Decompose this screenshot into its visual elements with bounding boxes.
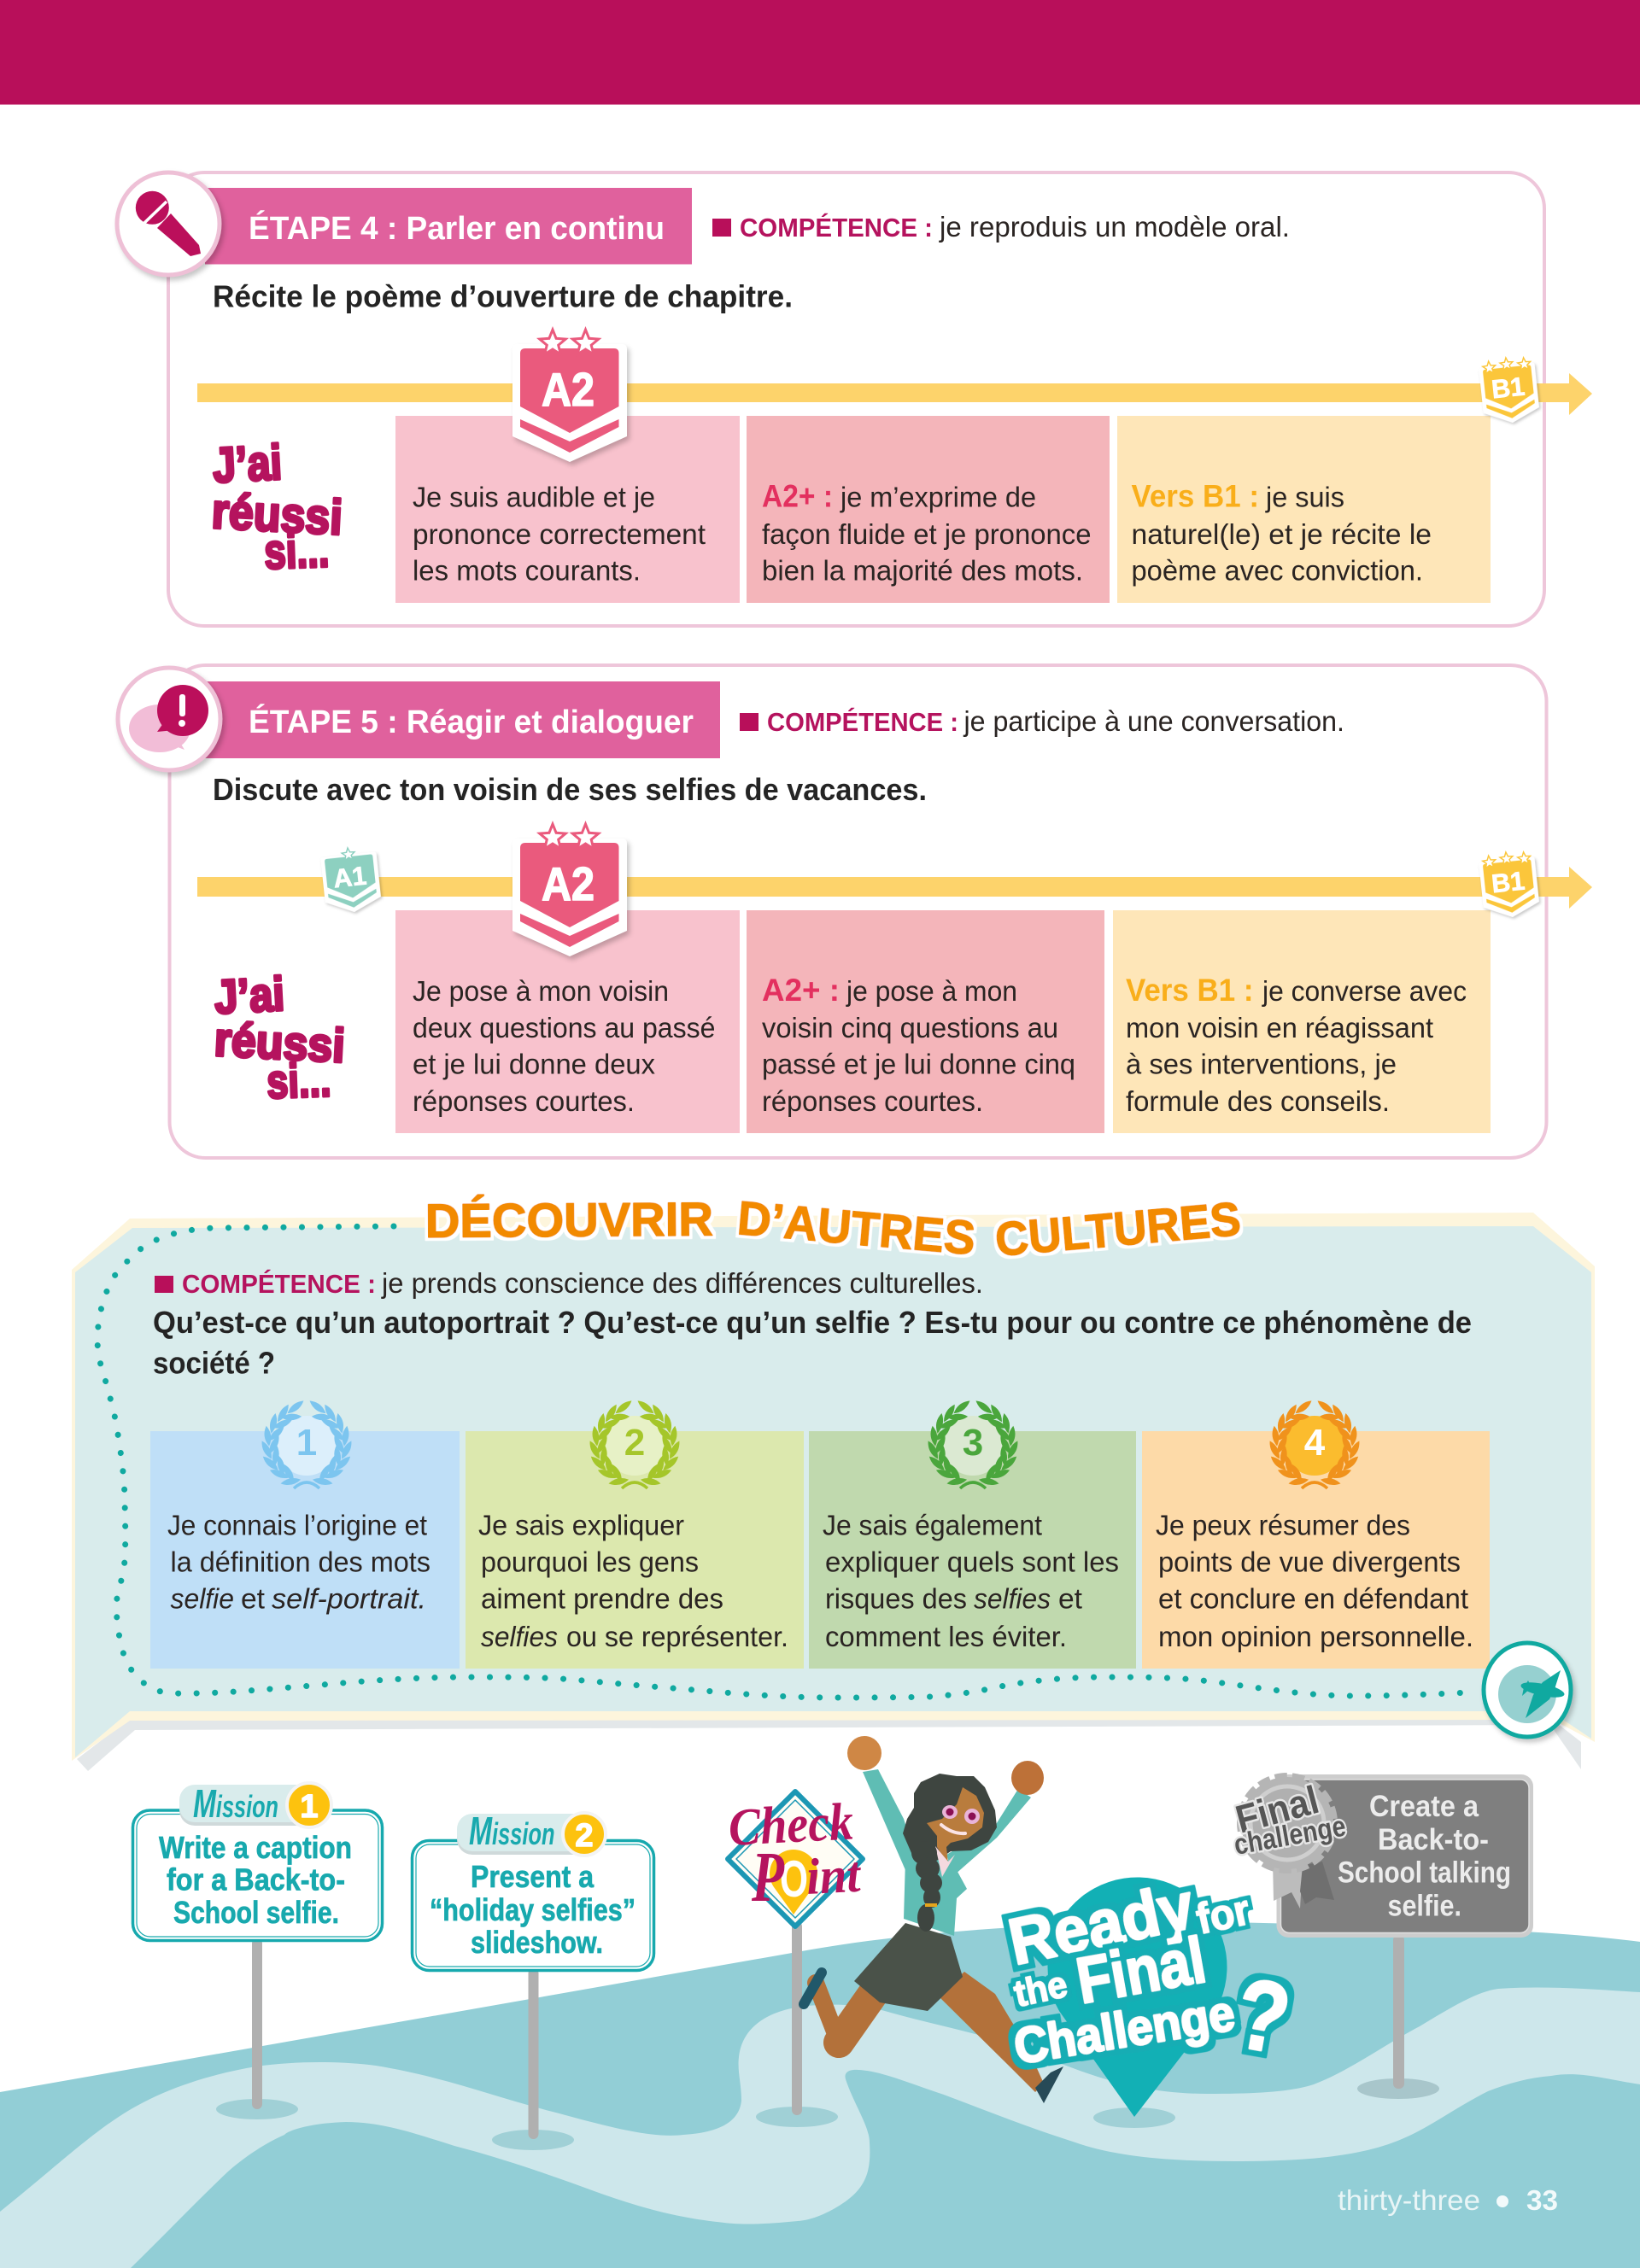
card 3: selfies — [974, 1583, 1051, 1614]
label: j'ai réussi si: si... — [266, 1052, 331, 1108]
icon: laurel 4: 4 — [1304, 1422, 1326, 1464]
callout: ready for the final challenge: Final — [1071, 1924, 1211, 2018]
sign: mission 2: “holiday selfies” — [430, 1892, 636, 1927]
arms — [863, 1769, 916, 1870]
icon: laurel 3: 3 — [963, 1422, 983, 1464]
badge: A2 — [512, 330, 627, 462]
box: vers B1 — [1117, 416, 1491, 603]
box: A2+: bien la majorité des mots. — [762, 555, 1083, 586]
icon: speech bubbles — [118, 668, 220, 770]
card 2: ou se représenter. — [566, 1621, 788, 1652]
sign: mission 1: Mission — [193, 1781, 278, 1826]
section title: CULTURES — [993, 1191, 1243, 1266]
label: j'ai réussi si: J’ai — [211, 435, 284, 494]
page number: 33 — [1526, 2184, 1558, 2216]
box: A2+: A2+ : — [762, 478, 833, 514]
heading banner: étape 5 — [205, 681, 720, 758]
rosette: Final — [1231, 1777, 1323, 1842]
character: jumping girl — [804, 1736, 1063, 2103]
competence line: je prends conscience des différences culturelles. — [381, 1267, 983, 1299]
panel: étape 4 — [117, 172, 1592, 626]
sign: mission 2: 2 — [575, 1818, 594, 1854]
sign: mission 1 — [133, 1781, 383, 2119]
hair — [903, 1774, 997, 1866]
sign: final challenge: Back-to- — [1378, 1823, 1489, 1856]
competence line: COMPÉTENCE : — [740, 213, 933, 243]
box: vers B1: je suis — [1265, 482, 1344, 512]
card 3: expliquer quels sont les — [825, 1546, 1119, 1578]
section title: DÉCOUVRIR — [425, 1192, 713, 1248]
face — [927, 1787, 984, 1864]
instruction: Récite le poème d’ouverture de chapitre. — [213, 278, 793, 314]
jacket — [904, 1847, 967, 1936]
card 3: risques des — [825, 1583, 967, 1614]
badge: A2: A2 — [542, 857, 594, 910]
callout: ready for the final challenge: the — [1010, 1963, 1071, 2015]
box: vers B1: mon voisin en réagissant — [1126, 1012, 1433, 1043]
badge: A2 — [512, 824, 627, 956]
box: vers B1: à ses interventions, je — [1126, 1049, 1397, 1079]
card 3 — [809, 1431, 1136, 1669]
braid — [911, 1841, 942, 1932]
card 1: self-portrait. — [272, 1583, 426, 1614]
fists — [847, 1736, 882, 1770]
card 4: et conclure en défendant — [1158, 1583, 1468, 1614]
sign: check point: O — [780, 1850, 808, 1908]
sign: final challenge: Create a — [1369, 1790, 1479, 1823]
card 4: mon opinion personnelle. — [1158, 1621, 1473, 1652]
box: vers B1 — [1113, 910, 1491, 1133]
callout: ready for the final challenge: Ready — [1003, 1869, 1200, 1979]
card 1: Je connais l’origine et — [167, 1510, 427, 1540]
sign: mission 1: Write a caption — [159, 1830, 352, 1865]
badge: B1 — [1478, 355, 1541, 425]
sign: mission 1: for a Back-to- — [167, 1862, 345, 1897]
box: A2 — [395, 910, 740, 1133]
box: A2+: façon fluide et je prononce — [762, 518, 1092, 550]
rosette: challenge — [1232, 1810, 1348, 1862]
card 4: points de vue divergents — [1158, 1546, 1461, 1578]
section title — [425, 1190, 1243, 1266]
label: j'ai réussi si: J’ai — [213, 967, 286, 1024]
competence line: COMPÉTENCE : — [767, 707, 958, 737]
card 2: Je sais expliquer — [478, 1510, 684, 1540]
near leg — [938, 1972, 1044, 2092]
card 2: pourquoi les gens — [481, 1546, 699, 1578]
rosette — [1231, 1777, 1348, 1909]
instruction: Discute avec ton voisin de ses selfies de vacances. — [213, 772, 927, 807]
sign: check point: P — [751, 1838, 785, 1917]
competence line: COMPÉTENCE : — [182, 1269, 376, 1299]
card 4: Je peux résumer des — [1156, 1510, 1410, 1540]
sign: check point: Check — [727, 1792, 855, 1857]
badge: B1: B1 — [1491, 867, 1526, 898]
question: Qu’est-ce qu’un autoportrait ? Qu’est-ce qu’un selfie ? Es-tu pour ou contre ce phénomène de — [153, 1305, 1472, 1340]
panel: découvrir d'autres cultures — [72, 1190, 1595, 1771]
box: A2: et je lui donne deux — [413, 1049, 655, 1079]
sign: final challenge — [1231, 1774, 1533, 2099]
card 3: et — [1058, 1583, 1082, 1614]
card 2: selfies — [481, 1621, 558, 1652]
page number: thirty-three — [1338, 2184, 1480, 2216]
level arrow — [197, 373, 1592, 415]
question — [153, 1305, 1472, 1380]
box: A2+: je m’exprime de — [840, 482, 1036, 512]
box: A2: Je suis audible et je — [413, 482, 655, 512]
card 1: la définition des mots — [171, 1546, 430, 1578]
callout: ready for the final challenge: ? — [1228, 1957, 1297, 2075]
section title: D’AUTRES — [735, 1190, 977, 1265]
sign: mission 1: 1 — [300, 1789, 319, 1825]
label: j'ai réussi si — [213, 967, 346, 1108]
landscape: road — [0, 1988, 1640, 2268]
panel: étape 5 — [118, 665, 1592, 1158]
icon: laurel 1 — [259, 1398, 354, 1488]
card 2 — [466, 1431, 804, 1669]
level arrow — [197, 867, 1592, 909]
sign: mission 2 — [412, 1809, 654, 2150]
callout: ready for the final challenge: for — [1192, 1885, 1254, 1944]
sign: mission 1: School selfie. — [173, 1895, 339, 1930]
card 3: Je sais également — [823, 1510, 1042, 1540]
question: société ? — [153, 1346, 275, 1380]
heading banner: étape 5: ÉTAPE 5 : Réagir et dialoguer — [249, 703, 694, 740]
page number — [1338, 2184, 1558, 2216]
box: vers B1: formule des conseils. — [1126, 1085, 1390, 1117]
heading banner: étape 4: ÉTAPE 4 : Parler en continu — [249, 209, 665, 247]
label: j'ai réussi si: si... — [263, 522, 330, 580]
box: A2: les mots courants. — [413, 555, 641, 586]
box: A2: deux questions au passé — [413, 1012, 716, 1043]
box: A2+: voisin cinq questions au — [762, 1012, 1058, 1043]
box: A2 — [395, 416, 740, 603]
badge: B1: B1 — [1491, 372, 1526, 404]
box: vers B1: poème avec conviction. — [1131, 555, 1423, 586]
badge: A1 — [319, 845, 383, 915]
label: j'ai réussi si: réussi — [213, 1012, 346, 1073]
sign: check point: int — [805, 1846, 864, 1905]
label: j'ai réussi si: réussi — [210, 483, 344, 546]
icon: plane — [1484, 1643, 1571, 1737]
icon: laurel 3 — [925, 1398, 1021, 1488]
badge: A1: A1 — [332, 862, 368, 893]
box: A2+ — [747, 910, 1104, 1133]
competence line: je participe à une conversation. — [964, 705, 1344, 737]
sign: mission 2: Present a — [471, 1859, 594, 1894]
box: vers B1: naturel(le) et je récite le — [1131, 518, 1432, 550]
far leg — [839, 1994, 873, 2043]
landscape: hill — [0, 1922, 1640, 2268]
callout: ready for the final challenge: Challenge — [1010, 1985, 1239, 2075]
box: A2+ — [747, 416, 1110, 603]
card 3: comment les éviter. — [825, 1621, 1067, 1652]
competence line — [712, 211, 1290, 243]
label: j'ai réussi si — [210, 435, 344, 580]
icon: microphone — [117, 172, 220, 275]
card 1 — [150, 1431, 460, 1669]
card 4 — [1142, 1431, 1490, 1669]
dotted route — [97, 1226, 1468, 1698]
icon: laurel 4 — [1267, 1398, 1362, 1488]
box: A2: prononce correctement — [413, 518, 706, 550]
icon: laurel 2 — [587, 1398, 682, 1488]
box: A2+: A2+ : — [762, 973, 840, 1008]
box: A2+: passé et je lui donne cinq — [762, 1049, 1075, 1079]
box: A2: Je pose à mon voisin — [413, 975, 669, 1007]
heading banner: étape 4 — [205, 188, 692, 265]
sign: mission 2: Mission — [469, 1809, 555, 1853]
card 2: aiment prendre des — [481, 1583, 723, 1614]
box: A2: réponses courtes. — [413, 1085, 635, 1117]
box: vers B1: Vers B1 : — [1131, 478, 1259, 514]
sign: final challenge: selfie. — [1387, 1889, 1461, 1923]
card 1: selfie — [171, 1583, 234, 1614]
badge: A2: A2 — [542, 363, 594, 416]
box: vers B1: je converse avec — [1262, 975, 1467, 1007]
skirt — [854, 1923, 963, 2011]
icon: laurel 2: 2 — [624, 1422, 645, 1464]
box: vers B1: Vers B1 : — [1126, 973, 1254, 1008]
sign: final challenge: School talking — [1338, 1856, 1511, 1889]
sign: mission 2: slideshow. — [471, 1925, 603, 1960]
box: A2+: réponses courtes. — [762, 1085, 983, 1117]
box: A2+: je pose à mon — [846, 975, 1017, 1007]
icon: laurel 1: 1 — [296, 1422, 317, 1464]
competence line — [740, 705, 1344, 737]
sign: check point — [727, 1792, 864, 2127]
card 1: et — [241, 1583, 265, 1614]
competence line: je reproduis un modèle oral. — [939, 211, 1290, 243]
callout: ready for the final challenge — [1003, 1869, 1297, 2128]
top banner — [0, 0, 1640, 104]
badge: B1 — [1478, 850, 1541, 920]
